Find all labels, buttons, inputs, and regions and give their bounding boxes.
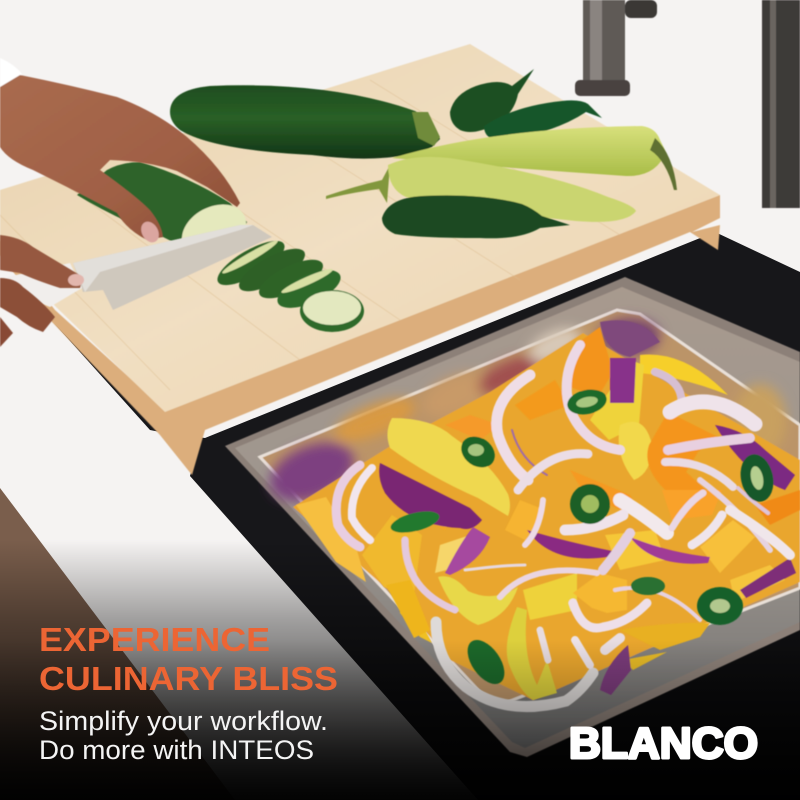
sleeve [0, 58, 22, 96]
large zucchini [170, 85, 440, 159]
metal tray [225, 277, 800, 757]
sink basin [53, 232, 800, 800]
purple onion pieces [379, 320, 796, 695]
logo: BLANCO: BLANCO [569, 719, 758, 768]
subheading: Simplify your workflow. [39, 706, 328, 736]
dark jalapeno [382, 195, 570, 238]
upper hand [0, 75, 240, 240]
hands [0, 58, 240, 347]
tray wall reflections [261, 318, 786, 513]
headline: CULINARY BLISS [39, 660, 338, 697]
jalapeno slices [389, 386, 778, 691]
long green peppers [392, 126, 666, 176]
subheading: Do more with INTEOS [39, 735, 314, 765]
vegetables on board [77, 69, 677, 332]
cutting board [0, 44, 720, 475]
lower shading over counter and sink [0, 540, 800, 800]
zucchini slices [212, 233, 364, 332]
headline: EXPERIENCE [39, 621, 270, 658]
vegetables in tray [296, 320, 800, 707]
lower hand [0, 235, 83, 288]
jalapeno [450, 69, 534, 132]
yellow and orange peppers [296, 327, 800, 700]
white onion strips [336, 345, 790, 707]
large yellow pepper slice [387, 418, 510, 516]
knife [7, 225, 272, 310]
faucet and tap [575, 0, 800, 208]
food base [293, 333, 800, 700]
bottom shading over tray [0, 640, 800, 800]
zucchini being cut [77, 162, 247, 252]
